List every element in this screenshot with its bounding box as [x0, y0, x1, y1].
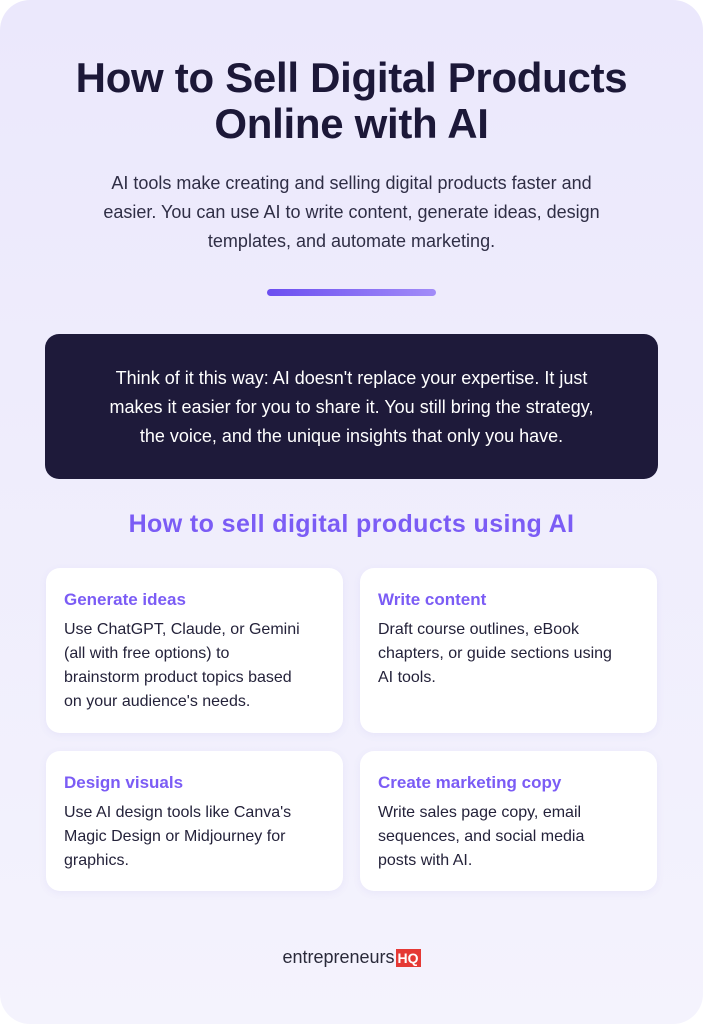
title — [76, 54, 627, 147]
card: design visuals — [46, 751, 343, 891]
card: write content — [360, 568, 657, 733]
card: marketing copy: Write sales page copy, email sequences, and social media posts with AI. — [378, 804, 584, 869]
accent bar — [267, 289, 436, 296]
card: generate ideas: Use ChatGPT, Claude, or Gemini (all with free options) to brainstorm product topics based on your audience's needs. — [64, 621, 300, 710]
callout: dark quote box: Think of it this way: AI doesn't replace your expertise. It just makes it easier for you to share it. You still bring the strategy, the voice, and the unique insights that only you have. — [110, 368, 593, 446]
title: How to Sell Digital Products — [76, 54, 627, 101]
card: marketing copy: Create marketing copy — [378, 773, 561, 792]
card: design visuals: Use AI design tools like Canva's Magic Design or Midjourney for graphics. — [64, 804, 291, 869]
section heading: How to sell digital products using AI — [129, 510, 574, 538]
title: Online with AI — [214, 100, 489, 147]
card: write content: Draft course outlines, eBook chapters, or guide sections using AI tools. — [378, 621, 612, 686]
logo: entrepreneursHQ — [282, 947, 419, 967]
callout: dark quote box — [45, 334, 658, 479]
card: generate ideas: Generate ideas — [64, 590, 186, 609]
card: generate ideas — [46, 568, 343, 733]
subtitle: AI tools make creating and selling digital products faster and easier. You can use AI to write content, generate ideas, design templates, and automate marketing. — [103, 173, 600, 251]
card: design visuals: Design visuals — [64, 773, 183, 792]
card: write content: Write content — [378, 590, 486, 609]
card: marketing copy — [360, 751, 657, 891]
